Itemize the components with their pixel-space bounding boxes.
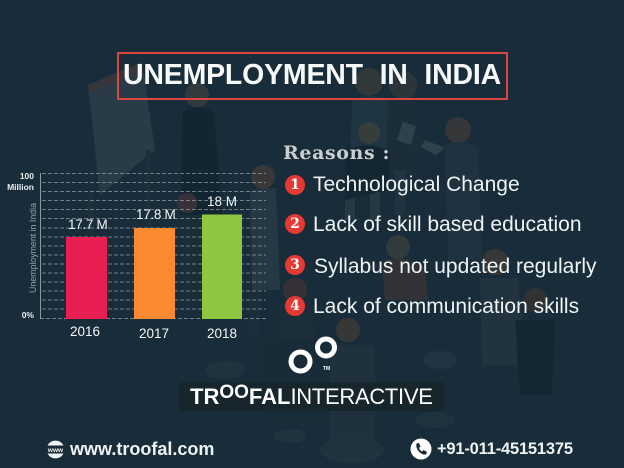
man lower right [515, 288, 555, 395]
man with orange hair [480, 249, 526, 365]
icon: number 3: 3 [290, 257, 300, 273]
website contact [47, 439, 214, 459]
value label 2017: 17.8 M [136, 207, 175, 222]
figures lower centre [260, 278, 330, 420]
logo mark: two rings with TM: TM [323, 366, 330, 372]
woman with hair [250, 165, 280, 340]
person seated with tablet [345, 122, 445, 200]
bar 2016 [66, 237, 107, 319]
person right [445, 117, 482, 260]
reason 4 [285, 295, 579, 318]
woman left small [172, 193, 205, 300]
group of people top right [345, 68, 422, 220]
icon: number 1: 1 [290, 177, 300, 193]
title box [117, 52, 508, 100]
icon: number 4: 4 [290, 298, 300, 314]
reason 2 [285, 213, 582, 236]
value label 2018: 18 M [207, 194, 237, 209]
axis label: 100 Million: Million [7, 182, 34, 192]
bar 2018 [202, 214, 242, 319]
axis [40, 173, 42, 319]
icon: phone [410, 438, 432, 460]
value label 2016: 17.7 M [68, 217, 107, 232]
phone contact [410, 438, 573, 460]
icon: number 4 [285, 296, 305, 316]
reason 1 [285, 173, 520, 196]
reason 4 text: Lack of communication skills [313, 295, 579, 318]
bar 2017 [134, 228, 175, 319]
centre woman seated [382, 235, 428, 300]
logo wordmark: TROOFALINTERACTIVE [190, 382, 433, 409]
year label 2018: 2018 [207, 326, 237, 341]
phone text: +91-011-45151375 [437, 440, 573, 458]
presenter [180, 83, 222, 215]
icon: globe: www [47, 447, 64, 454]
icon: number 2 [285, 214, 305, 234]
icon: number 3 [285, 255, 305, 275]
reasons heading: Reasons : [283, 142, 390, 164]
reason 3 [285, 255, 597, 278]
icon: globe [47, 440, 64, 458]
icon: number 1 [285, 175, 305, 195]
y axis title: Unemployment in India [28, 203, 38, 293]
reason 3 text: Syllabus not updated regularly [314, 255, 597, 278]
reason 1 text: Technological Change [313, 173, 520, 196]
website text: www.troofal.com [70, 439, 214, 459]
reason 2 text: Lack of skill based education [313, 213, 582, 236]
axis label: 100 Million: 100 [20, 171, 34, 181]
icon: number 2: 2 [290, 216, 300, 232]
presentation board [88, 62, 155, 240]
title: UNEMPLOYMENT IN INDIA [123, 59, 501, 91]
axis label: 0%: 0% [22, 310, 34, 320]
logo band [179, 382, 444, 411]
year label 2017: 2017 [139, 326, 169, 341]
year label 2016: 2016 [70, 324, 100, 339]
figure lower centre standing [205, 318, 456, 463]
axis label: 100 Million [7, 171, 34, 192]
